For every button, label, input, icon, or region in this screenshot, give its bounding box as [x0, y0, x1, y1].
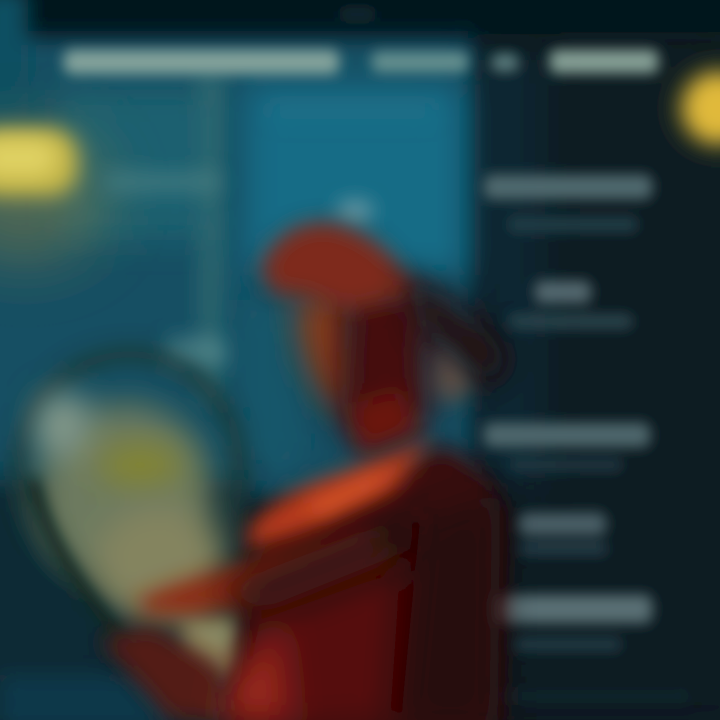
figure: red hair	[260, 222, 415, 310]
text block: left panel labels	[105, 102, 435, 368]
figure: tennis player	[100, 222, 510, 720]
figure: neck and face	[298, 290, 355, 410]
figure: ponytail	[400, 275, 510, 385]
figure: torso	[225, 445, 500, 720]
panel: teal backdrop	[0, 0, 545, 720]
icon: left yellow light	[0, 125, 110, 265]
text block: right column	[478, 175, 690, 701]
icon: tennis racket	[20, 354, 240, 675]
icon: right yellow light	[674, 66, 720, 150]
figure: orange shoulder	[245, 438, 430, 550]
figure: hands and lower arm	[100, 625, 230, 720]
figure: arm	[135, 530, 390, 615]
title	[64, 10, 658, 74]
